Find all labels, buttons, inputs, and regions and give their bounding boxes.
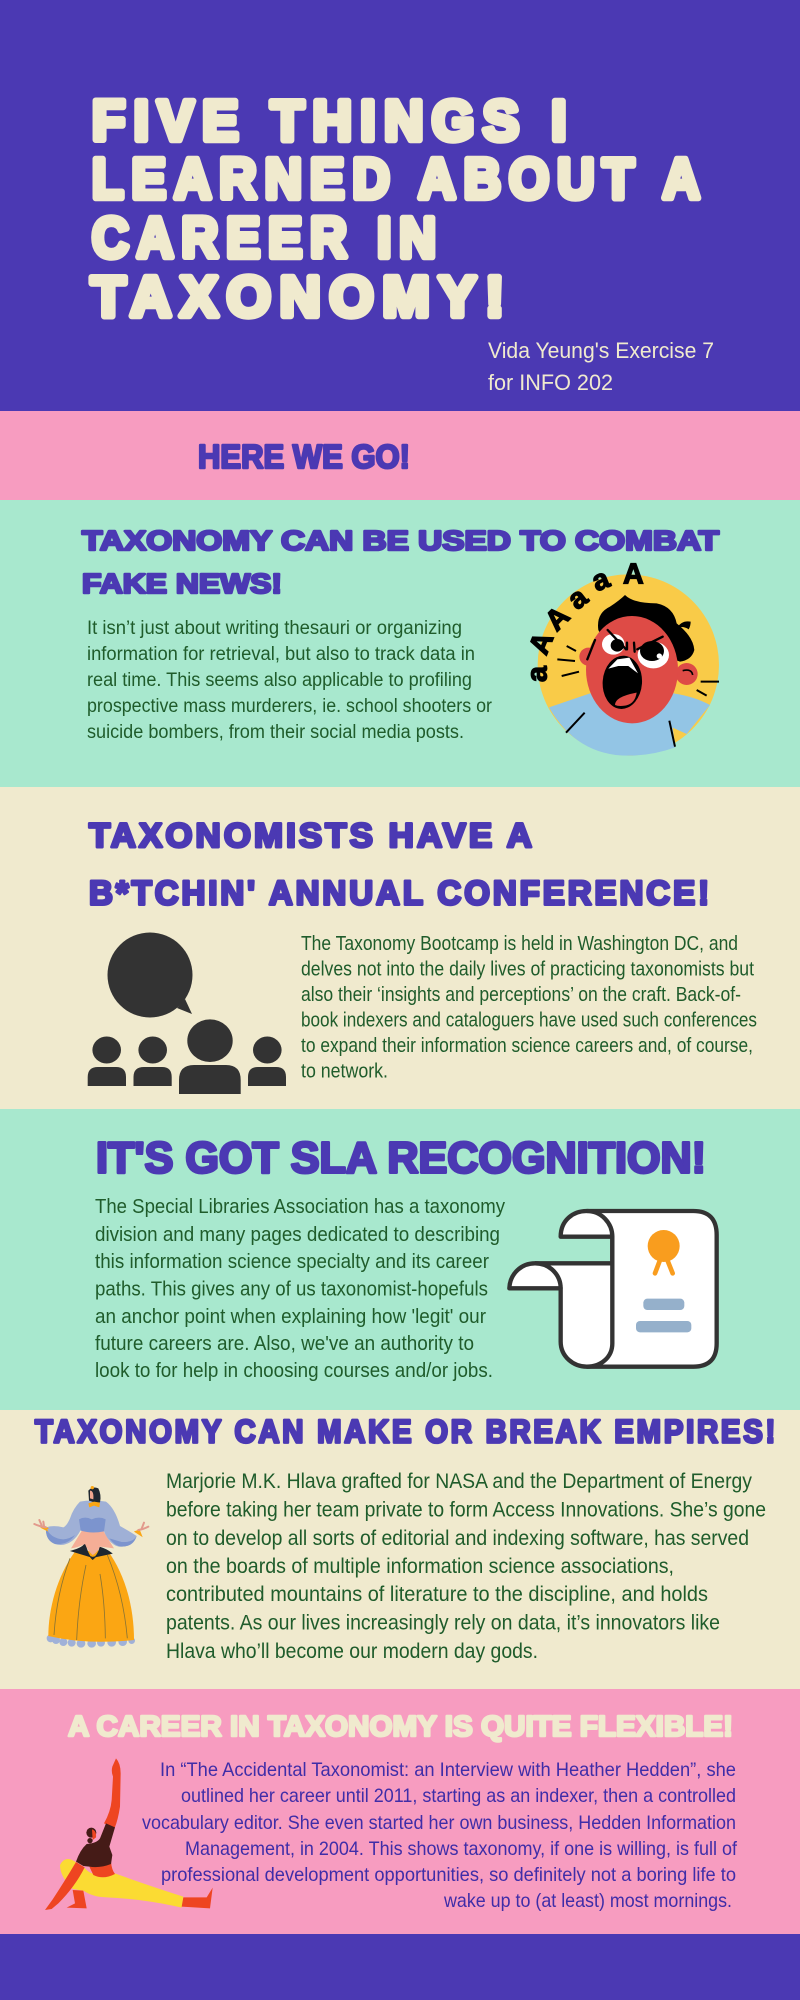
text: flexible career body: vocabulary editor. She even started her own business, Hedden Information — [142, 1812, 736, 1834]
text: SLA body: future careers are. Also, we've an authority to — [95, 1332, 474, 1355]
text: SLA body: paths. This gives any of us taxonomist-hopefuls — [95, 1278, 488, 1300]
text: SLA body: this information science specialty and its career — [95, 1250, 489, 1273]
text: fake news body: real time. This seems also applicable to profiling — [87, 670, 472, 691]
text: SLA body: an anchor point when explaining how 'legit' our — [95, 1305, 486, 1328]
icon: shouting man: A — [539, 600, 576, 637]
icon: shouting man: A — [523, 628, 560, 659]
text: fake news body: information for retrieval, but also to track data in — [87, 644, 475, 665]
text: fake news body: suicide bombers, from their social media posts. — [87, 722, 464, 743]
heading: conference: B*TCHIN' ANNUAL CONFERENCE! — [89, 874, 712, 912]
text: flexible career body: outlined her career until 2011, starting as an indexer, then a controlled — [181, 1785, 736, 1807]
heading: fake news: TAXONOMY CAN BE USED TO COMBAT — [82, 525, 719, 556]
subtitle: Vida Yeung's Exercise 7 — [488, 338, 714, 363]
text: SLA body — [95, 1195, 506, 1382]
heading: conference: TAXONOMISTS HAVE A — [89, 817, 535, 855]
heading: flexible career: A CAREER IN TAXONOMY IS QUITE FLEXIBLE! — [68, 1711, 733, 1743]
text: empires body: Marjorie M.K. Hlava grafted for NASA and the Department of Energy — [166, 1470, 752, 1493]
heading: fake news: FAKE NEWS! — [82, 568, 282, 599]
title: CAREER IN — [92, 206, 444, 270]
text: empires body: Hlava who’ll become our modern day gods. — [166, 1640, 538, 1663]
text: SLA body: The Special Libraries Association has a taxonomy — [95, 1195, 506, 1218]
icon: shouting man: a — [522, 665, 554, 682]
icon: shouting man — [522, 558, 719, 756]
text: conference body: delves not into the daily lives of practicing taxonomists but — [301, 958, 754, 980]
text: flexible career body — [142, 1759, 738, 1912]
text: SLA body: look to for help in choosing courses and/or jobs. — [95, 1359, 493, 1382]
text: flexible career body: In “The Accidental Taxonomist: an Interview with Heather Hedden”, she — [160, 1759, 736, 1781]
text: conference body — [301, 933, 757, 1082]
text: conference body: to network. — [301, 1060, 388, 1082]
text: SLA body: division and many pages dedicated to describing — [95, 1223, 500, 1246]
text: conference body: also their ‘insights and perceptions’ on the craft. Back-of- — [301, 984, 741, 1006]
text: empires body: before taking her team private to form Access Innovations. She’s gone — [166, 1498, 766, 1522]
text: conference body: The Taxonomy Bootcamp is held in Washington DC, and — [301, 933, 738, 955]
text: empires body: patents. As our lives increasingly rely on data, it’s innovators like — [166, 1612, 720, 1634]
heading: here we go: HERE WE GO! — [198, 438, 410, 475]
icon: yoga figure — [45, 1758, 213, 1910]
title: LEARNED ABOUT A — [92, 147, 708, 211]
text: fake news body: It isn’t just about writing thesauri or organizing — [87, 618, 462, 639]
icon: shouting man: a — [562, 580, 595, 616]
icon: audience with speech bubble — [88, 932, 286, 1094]
panel: footer band — [0, 1934, 800, 2000]
subtitle — [488, 338, 714, 395]
icon: shouting man: a — [587, 562, 615, 598]
text: empires body: on the boards of multiple information science associations, — [166, 1555, 674, 1578]
text: flexible career body: Management, in 2004. This shows taxonomy, if one is willing, is full of — [185, 1838, 738, 1860]
panel: title band — [0, 0, 800, 411]
title — [91, 89, 708, 329]
text: empires body: on to develop all sorts of editorial and indexing software, has served — [166, 1527, 749, 1550]
text: fake news body: prospective mass murderers, ie. school shooters or — [87, 696, 493, 717]
heading: SLA recognition: IT'S GOT SLA RECOGNITION! — [96, 1134, 706, 1182]
heading: conference — [89, 817, 712, 912]
text: flexible career body: professional development opportunities, so definitely not a boring life to — [161, 1864, 736, 1886]
panel: empires — [0, 1410, 800, 1689]
panel: flexible career — [0, 1689, 800, 1934]
title: FIVE THINGS I — [92, 89, 575, 153]
title: TAXONOMY! — [91, 265, 513, 329]
text: empires body: contributed mountains of literature to the discipline, and holds — [166, 1583, 708, 1606]
icon: certificate scroll — [509, 1211, 717, 1367]
icon: shouting man: A — [623, 558, 644, 590]
text: flexible career body: wake up to (at least) most mornings. — [443, 1890, 732, 1912]
panel: conference — [0, 787, 800, 1109]
heading: fake news — [82, 525, 719, 599]
panel: SLA recognition — [0, 1109, 800, 1410]
panel: here we go band — [0, 411, 800, 500]
text: empires body — [166, 1470, 766, 1663]
icon: woman in gown — [34, 1486, 148, 1648]
text: fake news body — [87, 618, 493, 743]
subtitle: for INFO 202 — [488, 370, 613, 395]
panel: fake news — [0, 500, 800, 787]
